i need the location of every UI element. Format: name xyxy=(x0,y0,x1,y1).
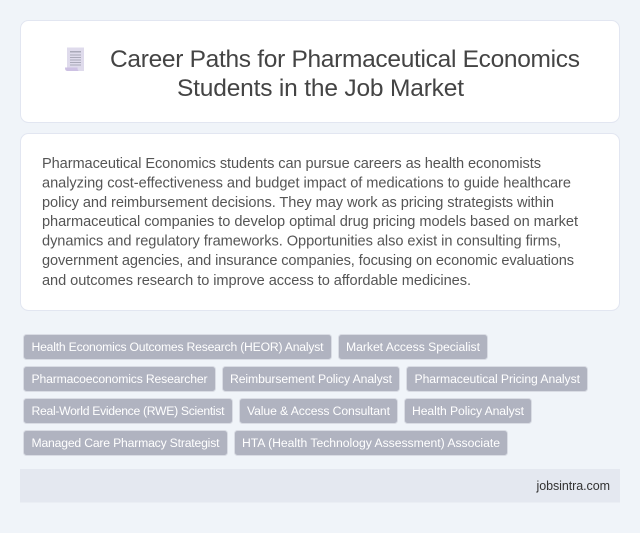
tag: Value & Access Consultant xyxy=(247,404,391,418)
text block: description: dynamics and regulatory frameworks. Opportunities also exist in consulting firms, xyxy=(42,234,561,250)
tag: Pharmaceutical Pricing Analyst xyxy=(414,372,581,386)
tag: Pharmacoeconomics Researcher xyxy=(32,372,208,386)
text block: description: analyzing cost-effectiveness and budget impact of medications to guide healthcare xyxy=(42,176,571,192)
tag xyxy=(222,366,400,392)
title xyxy=(110,46,580,102)
text block: description: Pharmaceutical Economics students can pursue careers as health economists xyxy=(42,156,541,172)
tag xyxy=(24,398,232,424)
text block: description: policy and reimbursement decisions. They may work as pricing strategists within xyxy=(42,195,554,211)
tag: Real-World Evidence (RWE) Scientist xyxy=(32,404,225,418)
text block: description xyxy=(42,156,578,289)
tag: HTA (Health Technology Assessment) Associate xyxy=(242,436,500,450)
panel: header card xyxy=(20,20,620,122)
tag xyxy=(406,366,588,392)
footer: jobsintra.com xyxy=(536,479,610,493)
text block: description: government agencies, and insurance companies, focusing on economic evaluations xyxy=(42,253,574,269)
tag xyxy=(24,430,228,456)
tag: Reimbursement Policy Analyst xyxy=(230,372,393,386)
text block: description: pharmaceutical companies to develop optimal drug pricing models based on market xyxy=(42,214,578,230)
title: Students in the Job Market xyxy=(177,75,464,102)
tag xyxy=(234,430,508,456)
title: Career Paths for Pharmaceutical Economics xyxy=(110,46,580,73)
icon: paper scroll xyxy=(65,48,84,71)
tag list xyxy=(24,334,588,456)
tag xyxy=(240,398,398,424)
text block: description: and outcomes research to improve access to affordable medicines. xyxy=(42,273,471,289)
panel: description card xyxy=(20,134,620,310)
tag xyxy=(404,398,532,424)
tag: Market Access Specialist xyxy=(346,340,481,354)
footer xyxy=(20,469,620,502)
tag: Managed Care Pharmacy Strategist xyxy=(32,436,220,450)
tag xyxy=(24,334,332,360)
tag: Health Economics Outcomes Research (HEOR) Analyst xyxy=(32,340,324,354)
tag xyxy=(24,366,216,392)
tag: Health Policy Analyst xyxy=(412,404,525,418)
tag xyxy=(338,334,488,360)
